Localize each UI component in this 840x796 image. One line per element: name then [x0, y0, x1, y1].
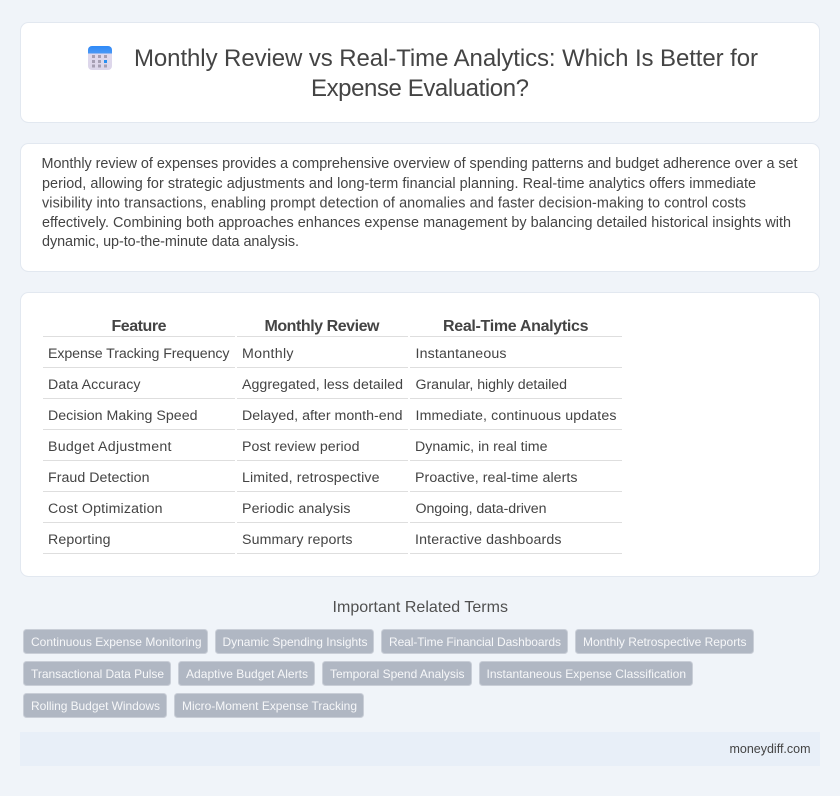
panel: table card	[20, 292, 820, 576]
intro text: visibility into transactions, enabling prompt detection of anomalies and faster decision-making to control costs	[42, 196, 746, 212]
row: data accuracy: Data Accuracy	[48, 377, 141, 393]
row: budget adjustment: Dynamic, in real time	[415, 439, 548, 455]
row: decision making speed	[48, 408, 616, 424]
title: Monthly Review vs Real-Time Analytics: Which Is Better for	[134, 45, 758, 72]
row: fraud detection: Proactive, real-time alerts	[415, 470, 578, 486]
tag: micro-moment expense tracking	[174, 694, 364, 718]
tag: dynamic spending insights	[216, 630, 374, 654]
row: budget adjustment	[48, 439, 548, 455]
tag: monthly retrospective reports: Monthly Retrospective Reports	[583, 635, 746, 649]
table header row: Feature	[112, 318, 167, 335]
panel: intro card	[20, 144, 820, 272]
intro text: period, allowing for strategic adjustments and long-term financial planning. Real-time analytics offers immediate	[42, 176, 756, 192]
tag: real-time financial dashboards	[382, 630, 568, 654]
tag: continuous expense monitoring: Continuous Expense Monitoring	[31, 635, 202, 649]
intro text: dynamic, up-to-the-minute data analysis.	[42, 234, 299, 250]
row: expense tracking frequency: Instantaneous	[416, 346, 506, 362]
tag: dynamic spending insights: Dynamic Spending Insights	[222, 635, 368, 649]
tag: rolling budget windows	[24, 694, 166, 718]
tag: temporal spend analysis	[322, 662, 472, 686]
related terms tags	[24, 630, 754, 718]
row: cost optimization: Ongoing, data-driven	[416, 501, 546, 517]
intro text	[42, 156, 798, 250]
row: expense tracking frequency	[48, 346, 506, 362]
tag: transactional data pulse	[24, 662, 170, 686]
row: decision making speed: Decision Making Speed	[48, 408, 198, 424]
intro text: Monthly review of expenses provides a comprehensive overview of spending patterns and budget adherence over a set	[42, 156, 798, 172]
tag: adaptive budget alerts	[178, 662, 314, 686]
tag: transactional data pulse: Transactional Data Pulse	[31, 667, 164, 681]
related terms heading: Important Related Terms	[332, 599, 508, 616]
footer	[20, 732, 820, 766]
row: reporting: Reporting	[48, 532, 110, 548]
row: expense tracking frequency: Expense Tracking Frequency	[48, 346, 230, 362]
row: expense tracking frequency: Monthly	[242, 346, 294, 362]
tag: real-time financial dashboards: Real-Time Financial Dashboards	[389, 635, 561, 649]
row: decision making speed: Delayed, after month-end	[242, 408, 402, 424]
tag: continuous expense monitoring	[24, 630, 208, 654]
row: budget adjustment: Budget Adjustment	[48, 439, 172, 455]
row: cost optimization: Cost Optimization	[48, 501, 162, 517]
title	[134, 45, 758, 102]
title: Expense Evaluation?	[311, 75, 529, 102]
intro text: effectively. Combining both approaches enhances expense management by balancing detailed historical insights with	[42, 215, 791, 231]
row: fraud detection: Limited, retrospective	[242, 470, 380, 486]
tag: micro-moment expense tracking: Micro-Moment Expense Tracking	[182, 699, 357, 713]
row: budget adjustment: Post review period	[242, 439, 360, 455]
row: cost optimization	[48, 501, 546, 517]
row: data accuracy: Granular, highly detailed	[416, 377, 567, 393]
footer source text: moneydiff.com	[730, 742, 810, 756]
row: fraud detection	[48, 470, 578, 486]
tag: monthly retrospective reports	[576, 630, 754, 654]
row: fraud detection: Fraud Detection	[48, 470, 150, 486]
table header row	[112, 318, 589, 335]
tag: instantaneous expense classification	[480, 662, 692, 686]
icon: calendar	[88, 46, 112, 70]
panel: header card	[20, 22, 820, 122]
tag: temporal spend analysis: Temporal Spend Analysis	[330, 667, 464, 681]
row: cost optimization: Periodic analysis	[242, 501, 350, 517]
row: reporting	[48, 532, 562, 548]
row: data accuracy: Aggregated, less detailed	[242, 377, 403, 393]
comparison table	[43, 318, 622, 554]
tag: rolling budget windows: Rolling Budget Windows	[31, 699, 160, 713]
row: reporting: Interactive dashboards	[415, 532, 562, 548]
tag: instantaneous expense classification: Instantaneous Expense Classification	[486, 667, 686, 681]
table header row: Monthly Review	[264, 318, 380, 335]
table header row: Real-Time Analytics	[443, 318, 589, 335]
row: data accuracy	[48, 377, 567, 393]
row: decision making speed: Immediate, continuous updates	[416, 408, 616, 424]
tag: adaptive budget alerts: Adaptive Budget Alerts	[186, 667, 308, 681]
row: reporting: Summary reports	[242, 532, 352, 548]
